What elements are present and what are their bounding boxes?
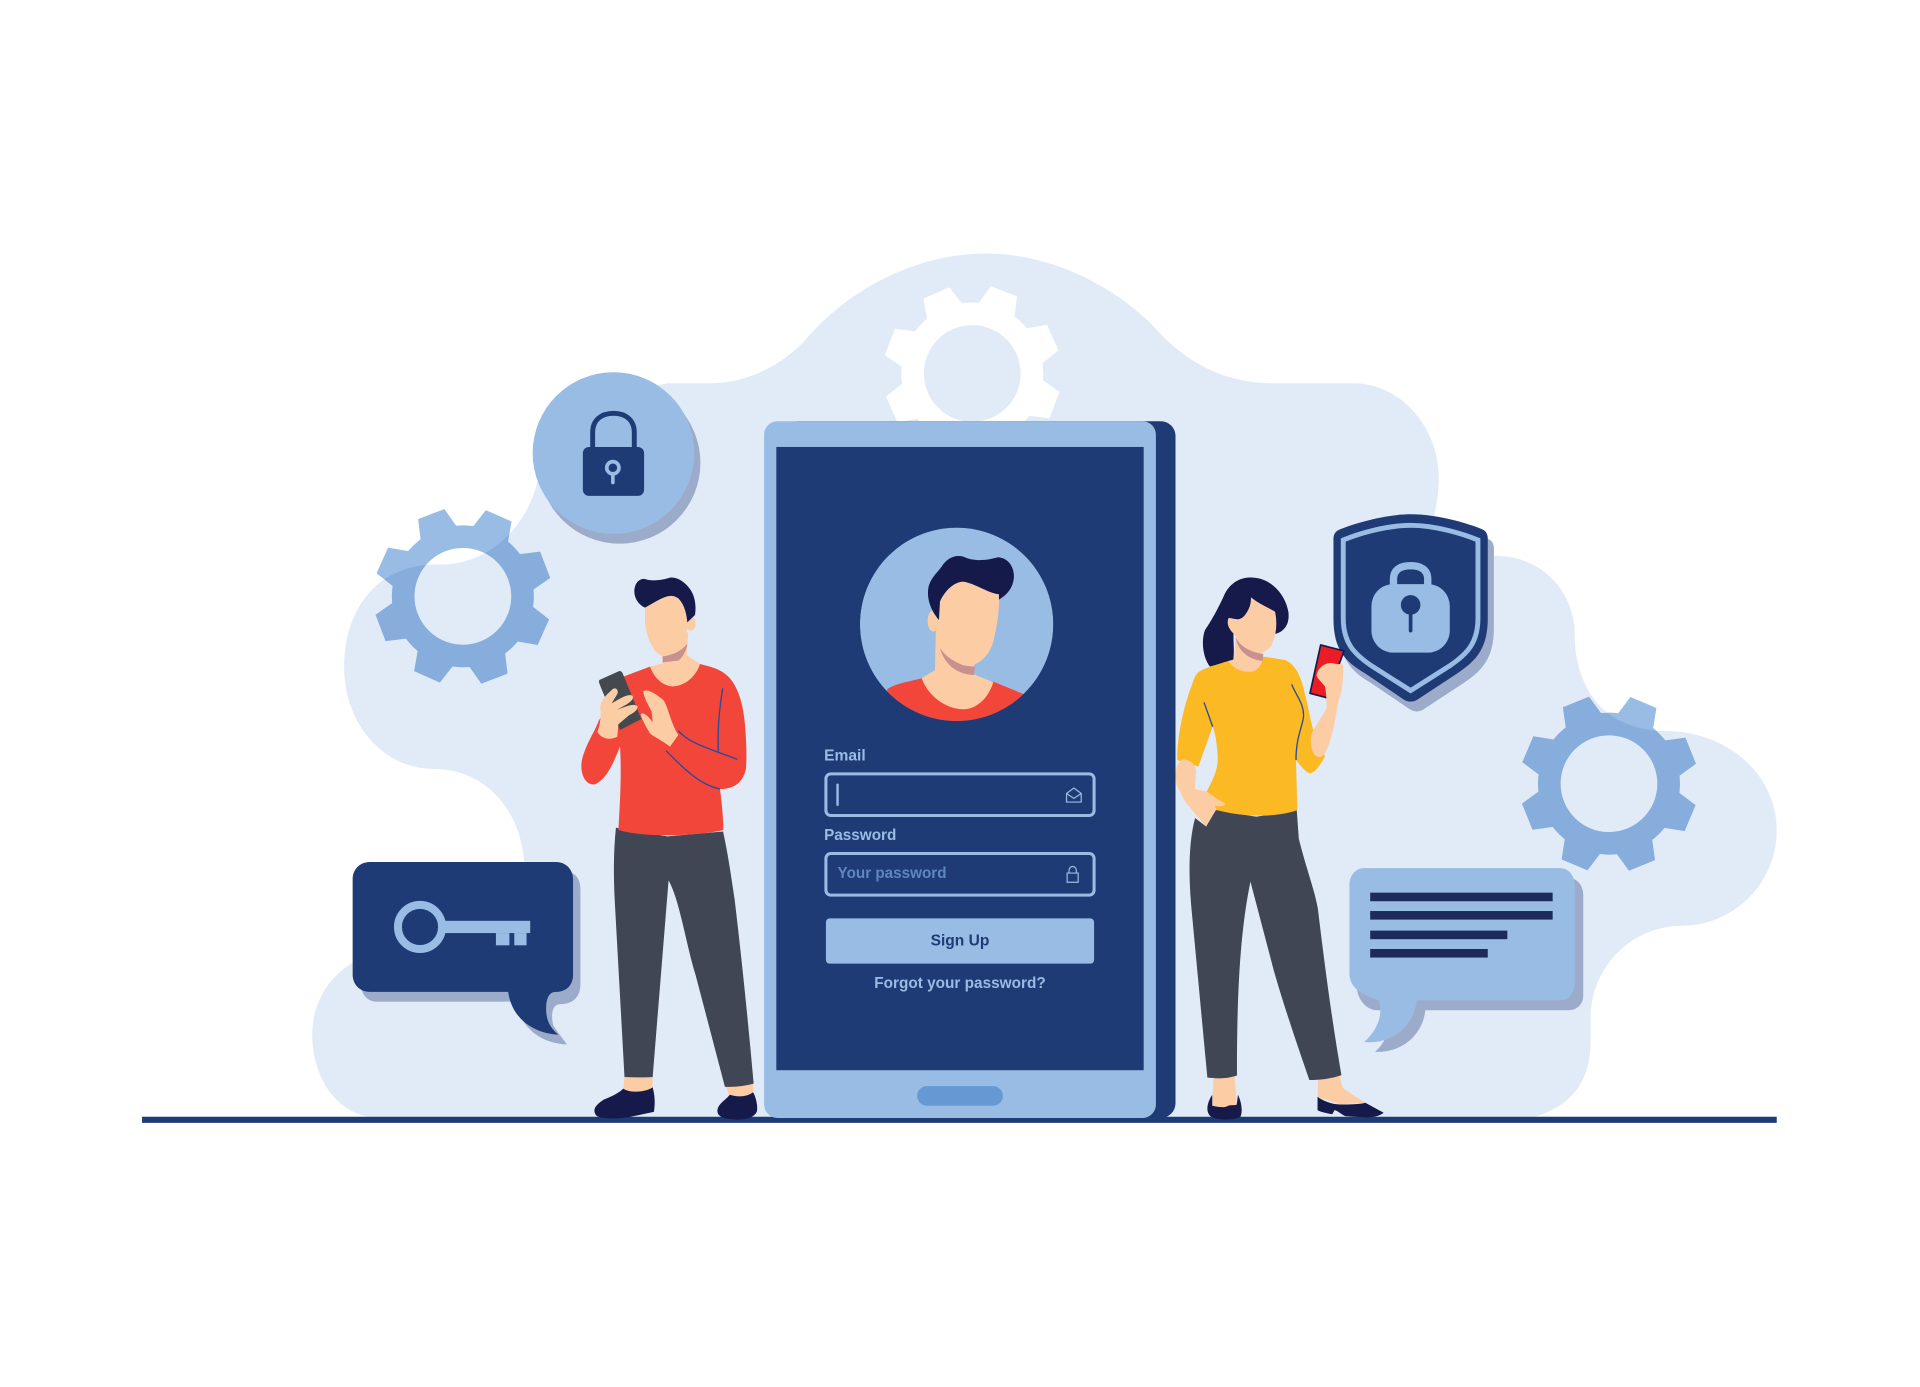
avatar [860, 528, 1053, 725]
woman right arm and hand [1311, 663, 1343, 757]
icon: small lock [1067, 866, 1078, 882]
form: password label: Password [824, 827, 896, 844]
woman sweater creases [1204, 684, 1304, 760]
man ear [686, 616, 696, 631]
man sleeve creases [666, 688, 737, 789]
text lines [1370, 893, 1553, 958]
man hair [634, 578, 696, 622]
icon: shield with lock [1333, 514, 1494, 711]
background blob [312, 253, 1777, 1117]
form: email label: Email [824, 747, 866, 764]
button: sign up: Sign Up [931, 932, 990, 949]
illustration: secure login scene [142, 254, 1777, 1123]
woman neck [1228, 637, 1263, 672]
form: email field [826, 774, 1094, 816]
woman sweater [1177, 657, 1325, 816]
gear: top white [858, 260, 1086, 487]
man sweater [581, 664, 746, 835]
woman feet [1212, 1073, 1365, 1107]
woman face [1228, 597, 1276, 652]
person: woman with phone [1176, 578, 1384, 1120]
icon: key [398, 905, 530, 949]
man ankles [623, 1075, 753, 1098]
woman trousers [1190, 810, 1341, 1080]
form: password field [826, 853, 1094, 895]
man phone [599, 671, 641, 730]
man neck shadow [663, 643, 687, 662]
man trousers [614, 828, 754, 1087]
button: sign up [826, 918, 1094, 964]
man face [645, 596, 687, 656]
gear: right [1493, 668, 1725, 899]
man upper body [581, 578, 746, 835]
gear: left [346, 480, 579, 713]
speech bubble: key [353, 862, 580, 1044]
man neck [650, 632, 700, 686]
form: password field: Your password [838, 865, 947, 882]
phone mockup [764, 421, 1176, 1118]
icon: padlock badge [533, 372, 700, 544]
man shoes [594, 1087, 757, 1120]
icon: envelope [1067, 788, 1081, 802]
woman neck shadow [1236, 638, 1263, 661]
link: forgot password: Forgot your password? [874, 975, 1046, 992]
ground line [142, 1117, 1777, 1123]
man left hand [597, 688, 638, 739]
speech bubble: text [1349, 868, 1583, 1052]
woman left arm and hand [1176, 759, 1225, 827]
man right hand [641, 690, 678, 747]
woman upper body [1176, 578, 1344, 827]
woman shoes [1207, 1095, 1384, 1120]
person: man with phone [581, 578, 757, 1120]
woman phone [1310, 645, 1344, 698]
woman hair [1203, 578, 1289, 667]
